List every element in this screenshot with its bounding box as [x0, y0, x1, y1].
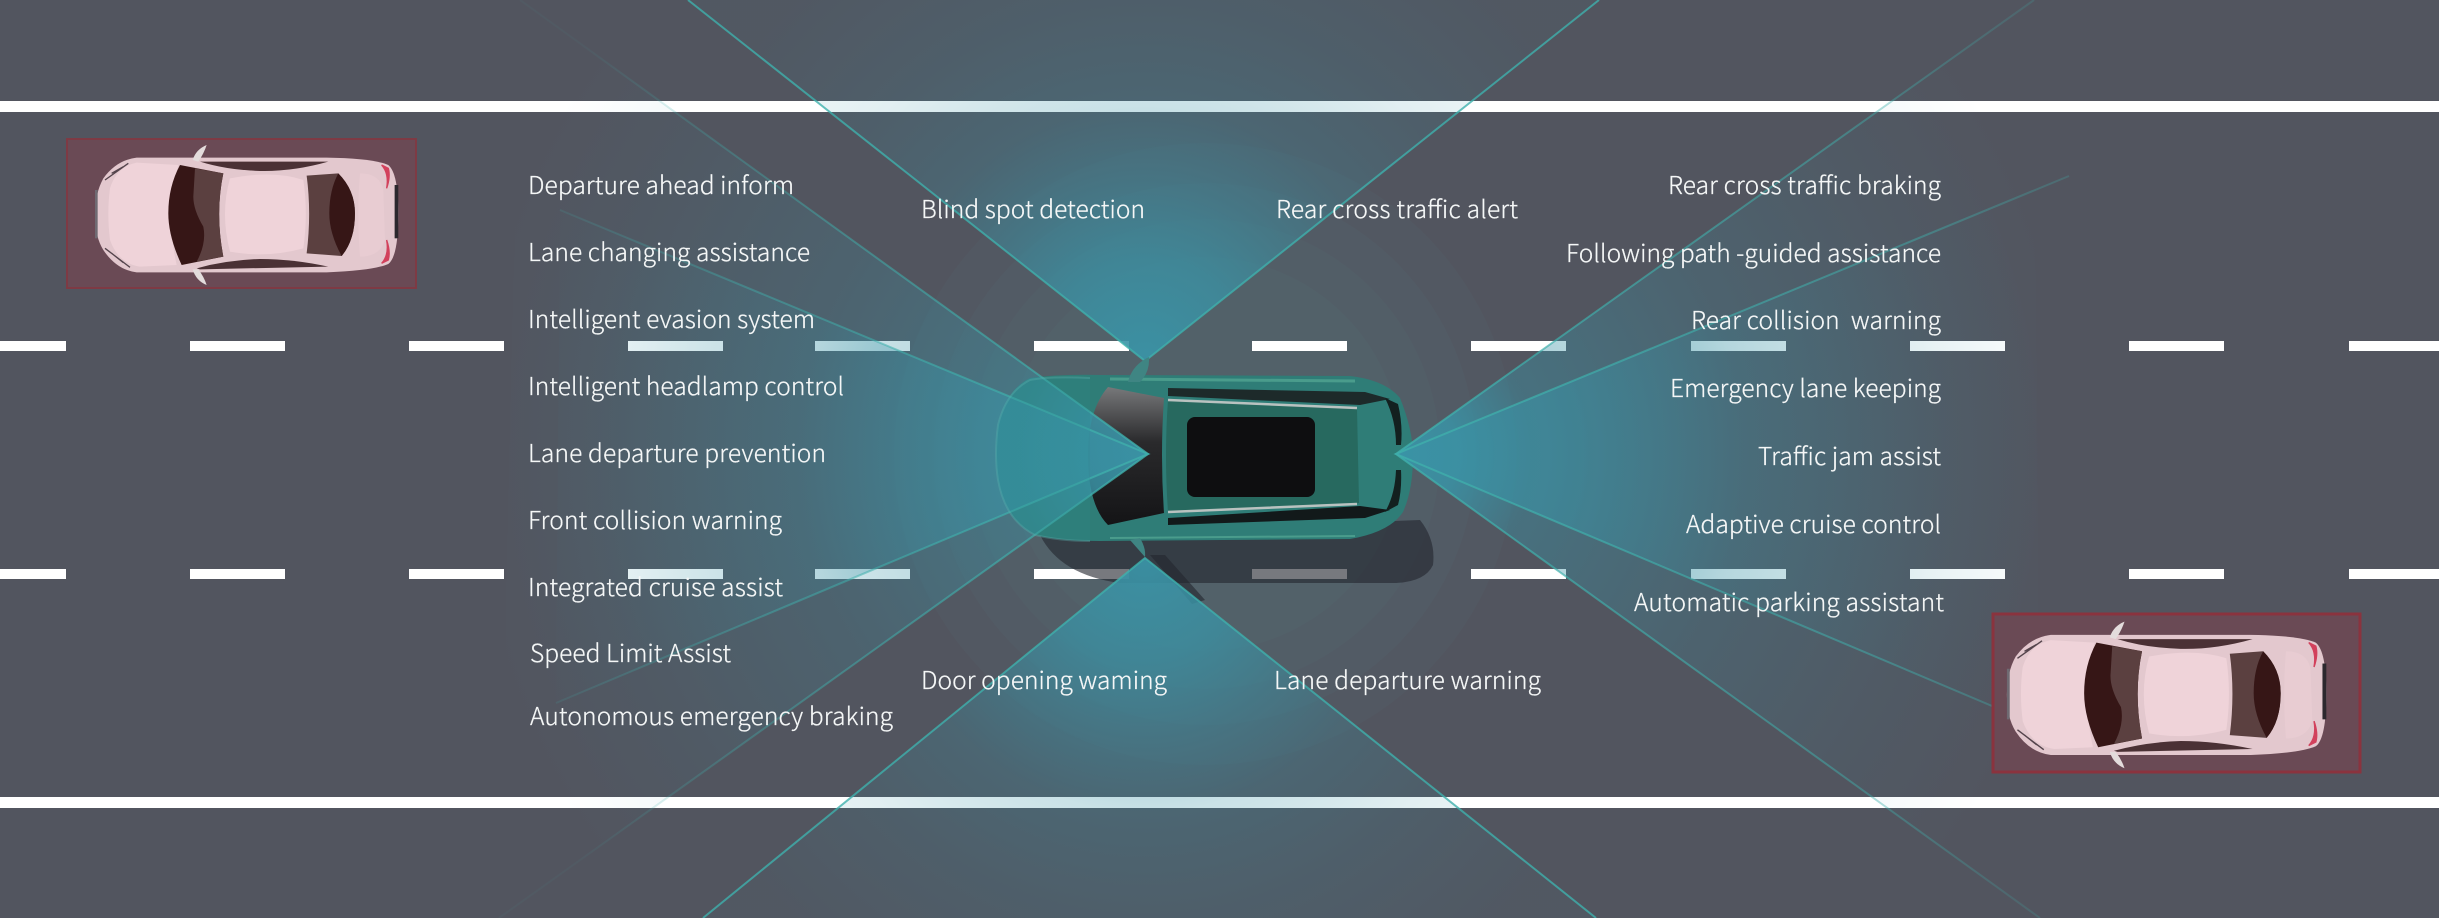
left function list: Intelligent headlamp control [528, 368, 844, 403]
centre function labels: Door opening waming [921, 662, 1167, 697]
left function list: Lane departure prevention [528, 435, 826, 470]
left function list [528, 167, 893, 733]
right function list: Automatic parking assistant [1634, 584, 1944, 619]
pink car: rear left with warning box [67, 139, 416, 288]
road markings [0, 101, 2439, 808]
right function list: Emergency lane keeping [1670, 370, 1941, 405]
left function list: Departure ahead inform [528, 167, 794, 202]
sensor range rings [894, 143, 1516, 765]
centre function labels: Blind spot detection [921, 191, 1145, 226]
sensor beam: rear narrow [1396, 176, 2069, 733]
left function list: Autonomous emergency braking [530, 698, 893, 733]
right function list: Adaptive cruise control [1686, 506, 1941, 541]
sensor beam: front narrow [556, 210, 1148, 703]
right function list: Rear cross traffic braking [1668, 167, 1941, 202]
centre function labels [921, 191, 1541, 697]
centre function labels: Lane departure warning [1274, 662, 1541, 697]
green car mirrors [1128, 357, 1149, 557]
sensor beam: bottom door zone [703, 558, 1596, 918]
left function list: Integrated cruise assist [528, 569, 783, 604]
sensor beam: top blind spot [688, 0, 1599, 361]
sensor beam: front wide [499, 0, 1148, 918]
centre function labels: Rear cross traffic alert [1276, 191, 1518, 226]
pink car: lower right with warning box [1993, 614, 2360, 772]
right function list: Rear collision warning [1691, 302, 1941, 337]
left function list: Front collision warning [528, 502, 782, 537]
sensor beam: rear wide [1396, 0, 2040, 918]
right function list [1566, 167, 1944, 619]
left function list: Intelligent evasion system [528, 301, 815, 336]
left function list: Speed Limit Assist [530, 635, 731, 670]
green car seen from above [996, 375, 1413, 541]
car shadow [1040, 520, 1433, 604]
right function list: Following path -guided assistance [1566, 235, 1941, 270]
green car hood outline [996, 377, 1090, 541]
left function list: Lane changing assistance [528, 234, 810, 269]
right function list: Traffic jam assist [1758, 438, 1941, 473]
